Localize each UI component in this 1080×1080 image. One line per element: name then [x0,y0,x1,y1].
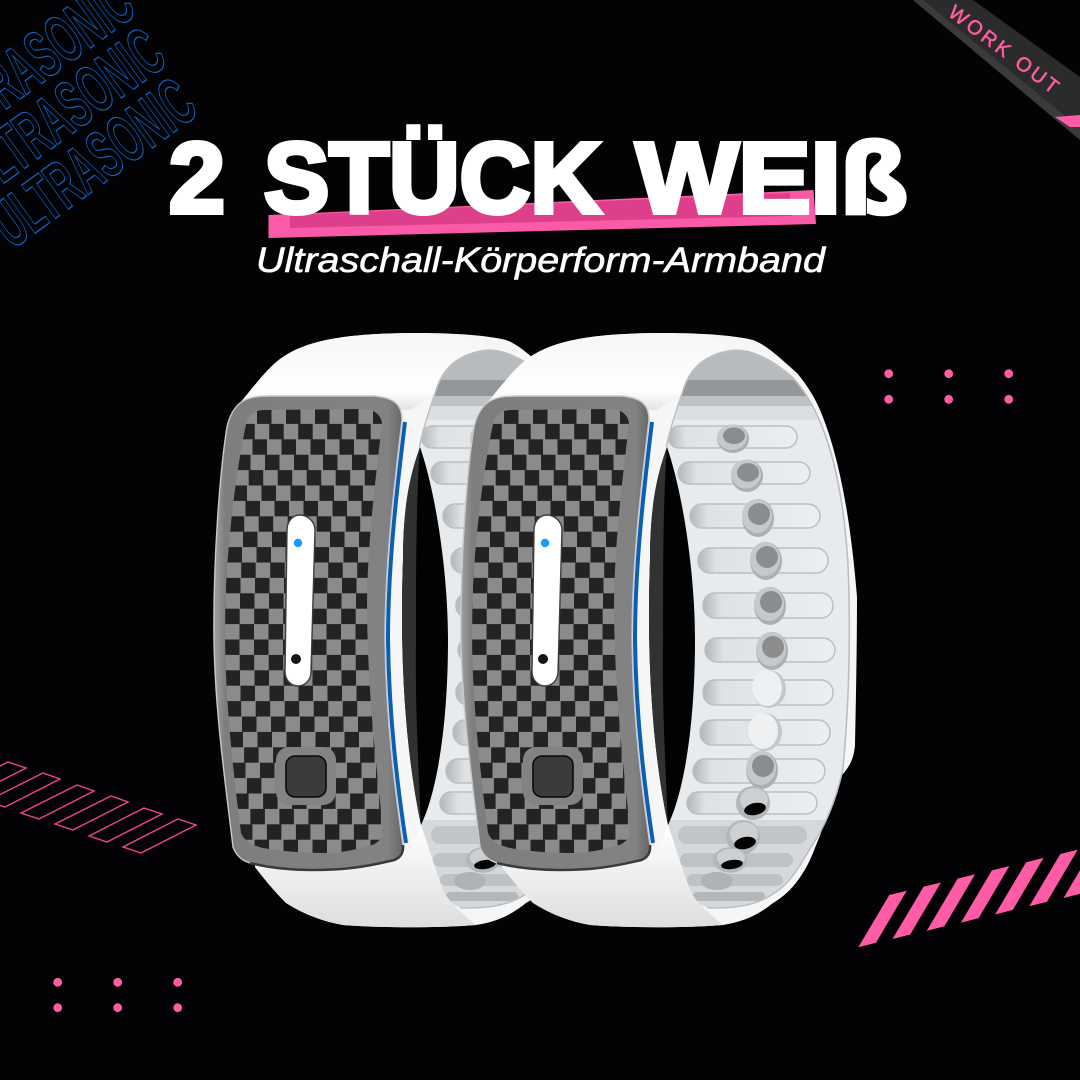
pink ribbon wedge [1055,115,1080,127]
bracelet right [443,333,867,927]
dots right [884,369,1013,404]
title: WEIß [636,122,907,234]
title [169,122,907,234]
bracelet left [196,333,620,927]
title highlight bar [268,190,816,238]
subtitle: Ultraschall-Körperform-Armband [256,241,827,280]
dots left [53,978,182,1012]
title: 2 [169,122,225,234]
ribbon label: WORK OUT [944,1,1063,98]
outlined stripes left [0,762,196,853]
ultrasonic outlined text [0,0,209,262]
work out ribbon [913,0,1080,140]
title: STÜCK [264,122,601,234]
solid pink stripes right [858,842,1080,947]
